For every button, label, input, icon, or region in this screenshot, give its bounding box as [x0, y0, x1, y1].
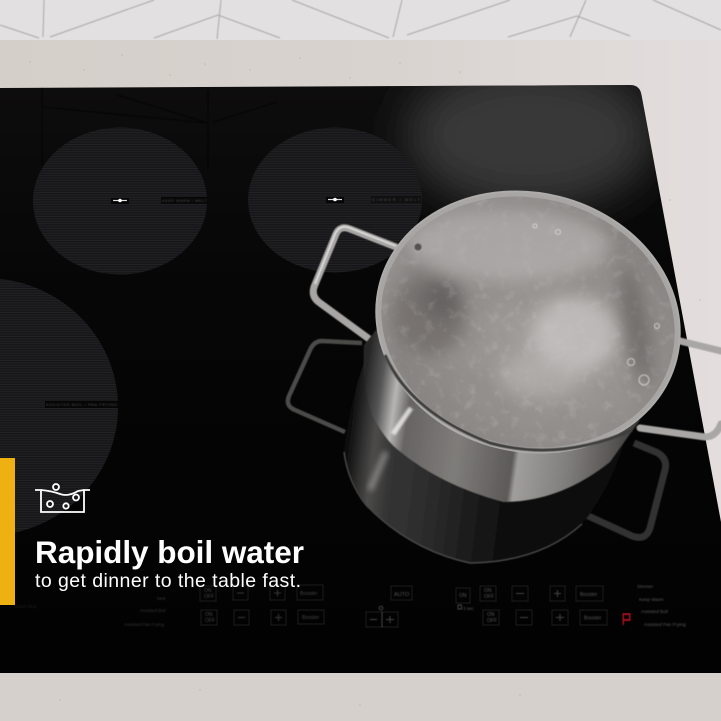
- control: left burner lower row: Booster: [302, 615, 320, 621]
- reflected left handle: [288, 341, 362, 432]
- control: left preset labels: [14, 596, 166, 627]
- control: left preset labels: Melt: [157, 596, 166, 601]
- control: left preset labels: Assisted Pan Frying: [124, 622, 165, 627]
- control: right burner upper row: ON: [484, 588, 492, 594]
- control: lock: [456, 588, 475, 611]
- water texture: [382, 200, 674, 440]
- backsplash tiles: [0, 0, 721, 42]
- control: right burner lower row: ON: [487, 612, 495, 618]
- pot body metal band: [364, 300, 640, 502]
- left handle: [313, 228, 396, 344]
- reflected right handle: [584, 443, 666, 537]
- control: timer: [366, 586, 412, 627]
- steam: [405, 60, 655, 210]
- control: lock: ON: [459, 593, 467, 599]
- control: right burner lower row: [483, 610, 607, 625]
- control: right preset labels: Keep Warm: [639, 597, 664, 602]
- control: left burner lower row: [201, 610, 324, 625]
- burner: front left: ASSISTED BOIL / PAN FRYING: [46, 402, 117, 407]
- burner: rear right: [248, 128, 422, 272]
- dark rim spot: [414, 244, 422, 250]
- yellow accent bar: [0, 458, 15, 605]
- icon: boiling pot: [35, 484, 90, 512]
- water: [354, 166, 702, 478]
- control: right preset labels: Simmer: [637, 584, 654, 589]
- icon: red power indicator: [623, 614, 630, 625]
- control: right burner lower row: OFF: [487, 618, 497, 624]
- control: right preset labels: Assisted Pan Frying: [644, 622, 686, 627]
- headline: Rapidly boil water: [35, 534, 304, 570]
- control: right burner upper row: Booster: [580, 592, 598, 598]
- pot reflection in glass: [288, 341, 666, 563]
- control: left burner lower row: ON: [205, 612, 213, 618]
- right handle: [640, 341, 721, 437]
- control: timer: AUTO: [394, 592, 410, 598]
- control: left burner upper row: Booster: [300, 591, 318, 597]
- burner: front left: [0, 278, 118, 536]
- body highlight: [393, 408, 411, 434]
- control: left preset labels: Assisted Boil: [140, 608, 166, 613]
- rim: [348, 160, 708, 484]
- burner: rear left: KEEP WARM / MELT: [162, 198, 208, 203]
- boiling bubbles: [533, 224, 660, 385]
- control: lock: 3 sec: [463, 606, 475, 611]
- control: right preset labels: Assisted Boil: [641, 609, 668, 614]
- subheading: to get dinner to the table fast.: [35, 570, 301, 592]
- steam haze: [410, 209, 610, 281]
- control: right burner lower row: Booster: [584, 616, 602, 622]
- control: left burner upper row: [200, 585, 323, 601]
- reflected highlight: [370, 452, 386, 490]
- control: right preset labels: [637, 584, 686, 627]
- reflected body: [344, 360, 625, 563]
- control: left burner lower row: OFF: [205, 618, 215, 624]
- pot: [313, 160, 721, 502]
- burner: rear right: SIMMER / MELT: [372, 197, 421, 202]
- control: right burner upper row: OFF: [484, 594, 494, 600]
- control: left burner upper row: ON: [204, 588, 212, 594]
- control: left preset labels: ASSISTED: [14, 604, 37, 609]
- control: left burner upper row: OFF: [204, 594, 214, 600]
- burner: rear left: [33, 128, 208, 274]
- control: right burner upper row: [480, 586, 603, 601]
